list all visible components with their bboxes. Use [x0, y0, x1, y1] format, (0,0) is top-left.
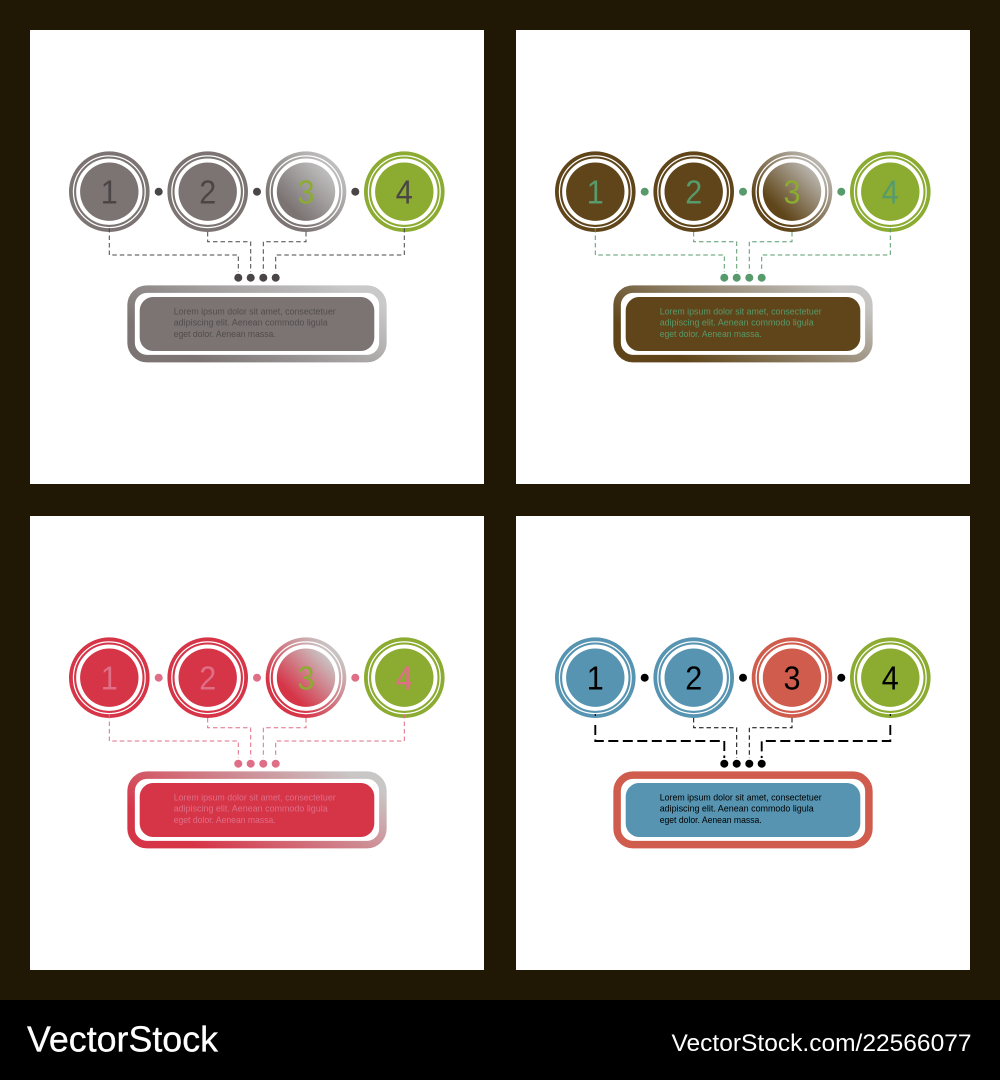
text box [131, 775, 383, 845]
text box: Lorem ipsum dolor sit amet, consectetuer [660, 792, 822, 802]
circle 3: 3 [784, 660, 800, 697]
circle 4 [852, 153, 929, 230]
text box: Lorem ipsum dolor sit amet, consectetuer [174, 306, 336, 316]
circle 2: 2 [199, 660, 216, 697]
circle 2: 2 [199, 174, 216, 211]
circle 1 [71, 153, 148, 230]
circle 3: 3 [784, 174, 800, 211]
text box [617, 775, 869, 845]
circle 4: 4 [396, 660, 413, 697]
circle 4: 4 [882, 174, 899, 211]
circle 3 [268, 153, 344, 230]
text box: eget dolor. Aenean massa. [660, 815, 762, 825]
text box [617, 289, 869, 359]
circle 4: 4 [396, 174, 413, 211]
text box: adipiscing elit. Aenean commodo ligula [660, 318, 815, 328]
circle 4 [366, 153, 443, 230]
text box: adipiscing elit. Aenean commodo ligula [174, 318, 329, 328]
circle 1: 1 [587, 660, 604, 697]
circle 1: 1 [101, 660, 118, 697]
circle 3 [754, 639, 830, 716]
dashed connectors [595, 714, 890, 758]
circle 1 [557, 639, 634, 716]
text box: adipiscing elit. Aenean commodo ligula [660, 804, 815, 814]
text box: eget dolor. Aenean massa. [660, 329, 762, 339]
circle 3 [268, 639, 344, 716]
circle 3 [754, 153, 830, 230]
circle 1 [557, 153, 634, 230]
dashed connectors [109, 714, 404, 758]
text box: Lorem ipsum dolor sit amet, consectetuer [660, 306, 822, 316]
separator dots [641, 674, 845, 682]
connector end dots [720, 274, 766, 282]
circle 2 [169, 153, 246, 230]
text box: Lorem ipsum dolor sit amet, consectetuer [174, 792, 336, 802]
dashed connectors [109, 228, 404, 272]
panel: brown variant [516, 30, 970, 484]
text box [131, 289, 383, 359]
circle 3: 3 [298, 174, 314, 211]
circle 4 [852, 639, 929, 716]
footer logo text: VectorStock [27, 1019, 219, 1060]
dashed connectors [595, 228, 890, 272]
circle 4 [366, 639, 443, 716]
circle 1 [71, 639, 148, 716]
text box: eget dolor. Aenean massa. [174, 815, 276, 825]
circle 2 [169, 639, 246, 716]
circle 1: 1 [587, 174, 604, 211]
circle 1: 1 [101, 174, 118, 211]
panel: blue variant [516, 516, 970, 970]
separator dots [155, 188, 359, 196]
panel: gray variant [30, 30, 484, 484]
circle 2 [655, 153, 732, 230]
separator dots [641, 188, 845, 196]
connector end dots [720, 760, 766, 768]
connector end dots [234, 274, 280, 282]
circle 2: 2 [685, 660, 702, 697]
circle 3: 3 [298, 660, 314, 697]
connector end dots [234, 760, 280, 768]
footer image id: VectorStock.com/22566077 [672, 1030, 972, 1057]
separator dots [155, 674, 359, 682]
footer bar [0, 1000, 1000, 1080]
circle 2 [655, 639, 732, 716]
text box: adipiscing elit. Aenean commodo ligula [174, 804, 329, 814]
circle 4: 4 [882, 660, 899, 697]
panel: red variant [30, 516, 484, 970]
text box: eget dolor. Aenean massa. [174, 329, 276, 339]
circle 2: 2 [685, 174, 702, 211]
